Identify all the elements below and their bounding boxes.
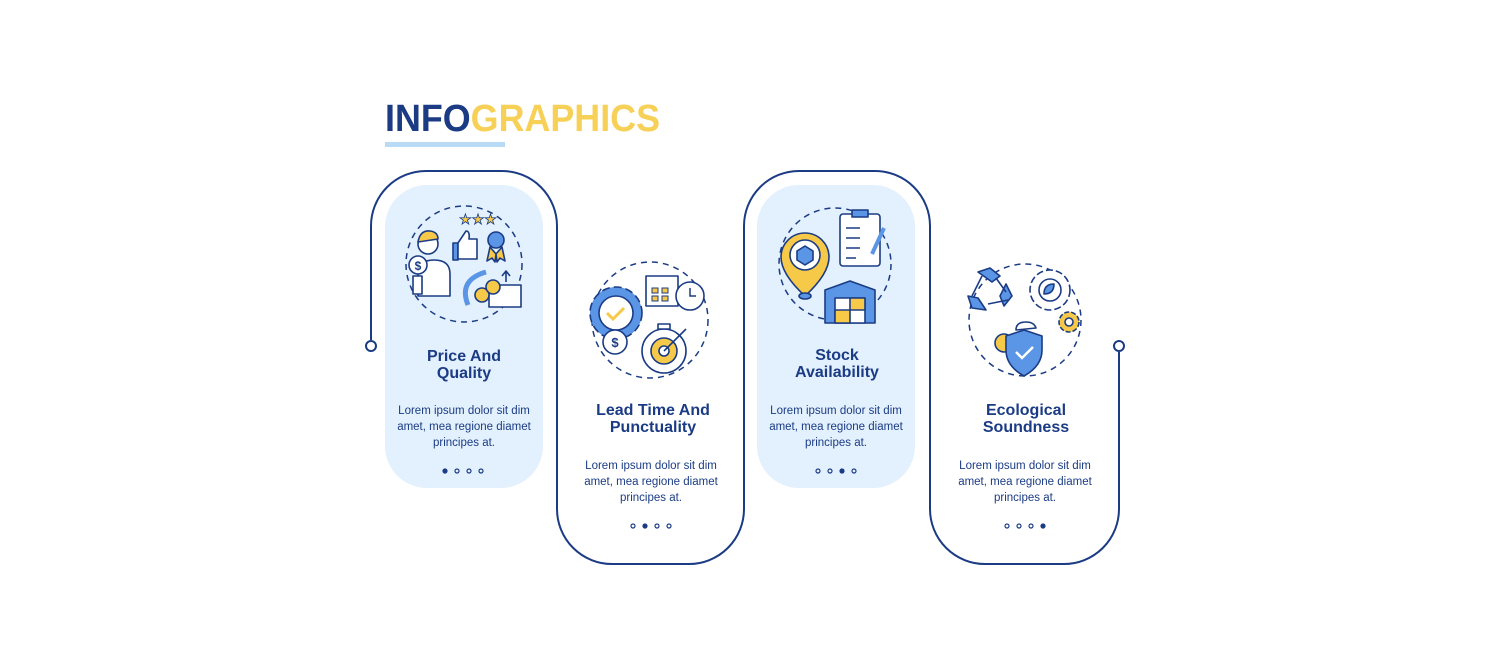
- panel: lead time and punctuality: Punctuality: [610, 419, 696, 436]
- body text: principes at.: [805, 437, 867, 449]
- body text: Lorem ipsum dolor sit dim: [398, 405, 530, 417]
- icon: price and quality: [406, 206, 522, 322]
- body text: amet, mea regione diamet: [584, 476, 719, 488]
- heading: Ecological: [986, 402, 1066, 419]
- body text: amet, mea regione diamet: [958, 476, 1093, 488]
- icon: pin clipboard warehouse: [779, 208, 891, 323]
- body text: [397, 405, 532, 449]
- body text: [769, 405, 904, 449]
- pagination dots: [1005, 524, 1045, 528]
- body text: [958, 460, 1093, 504]
- icon: gears clock target: $: [611, 335, 619, 350]
- panel: ecological soundness: [958, 264, 1093, 528]
- pagination dots: [816, 469, 856, 473]
- panel: price and quality: Quality: [437, 365, 491, 382]
- heading: price and quality: Price And: [427, 348, 501, 365]
- heading: Lead Time And: [596, 402, 710, 419]
- body text: Lorem ipsum dolor sit dim: [959, 460, 1091, 472]
- connecting outline path: [366, 171, 1124, 564]
- body text: amet, mea regione diamet: [769, 421, 904, 433]
- heading: Stock: [815, 347, 859, 364]
- panel: price and quality: [397, 206, 532, 473]
- body text: Lorem ipsum dolor sit dim: [585, 460, 717, 472]
- icon: gears clock target: [590, 262, 708, 378]
- body text: Lorem ipsum dolor sit dim: [770, 405, 902, 417]
- panel: ecological soundness: Soundness: [983, 419, 1069, 436]
- pagination dots: [631, 524, 671, 528]
- icon: recycle gears shield: [968, 264, 1081, 376]
- pagination dots: [443, 469, 483, 473]
- panel: stock availability: Availability: [795, 364, 879, 381]
- icon: price and quality: ★★★: [459, 211, 497, 227]
- body text: principes at.: [994, 492, 1056, 504]
- panel: stock availability: [769, 208, 904, 473]
- body text: principes at.: [433, 437, 495, 449]
- panel: lead time and punctuality: [584, 262, 719, 528]
- icon: price and quality: $: [415, 259, 422, 273]
- panel backgrounds: [385, 185, 915, 488]
- title: INFOGRAPHICS: [385, 98, 660, 140]
- body text: [584, 460, 719, 504]
- body text: principes at.: [620, 492, 682, 504]
- body text: amet, mea regione diamet: [397, 421, 532, 433]
